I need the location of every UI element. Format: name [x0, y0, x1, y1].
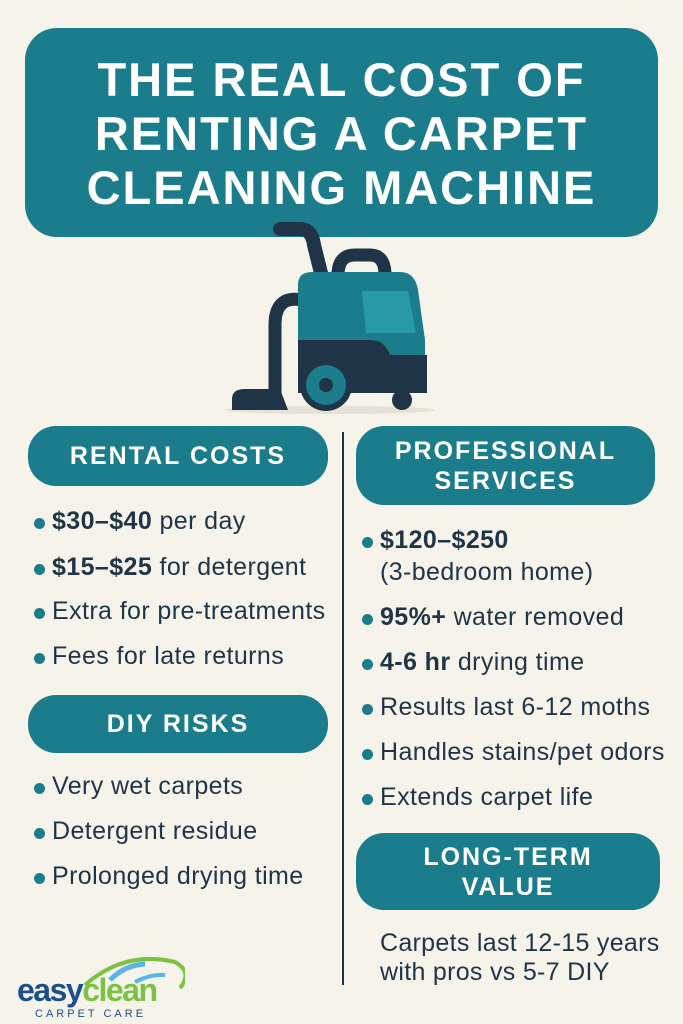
icon: carpet cleaning machine	[225, 222, 435, 414]
list: DIY risks: Very wet carpets	[52, 772, 243, 800]
list: professional services: Extends carpet life	[380, 783, 593, 811]
divider	[342, 432, 344, 985]
list: rental costs	[34, 507, 326, 670]
heading: long-term value: LONG-TERM	[423, 842, 593, 870]
heading: long-term value	[356, 833, 660, 910]
list: professional services: Results last 6-12 moths	[380, 693, 650, 721]
heading: professional services: SERVICES	[434, 466, 576, 494]
panel: professional services	[356, 426, 665, 811]
list: rental costs: $15–$25 for detergent	[52, 553, 306, 581]
list: rental costs: Fees for late returns	[52, 642, 284, 670]
heading: DIY risks	[28, 695, 328, 753]
list: professional services: (3-bedroom home)	[380, 558, 593, 586]
logo: easyclean carpet care: CARPET CARE	[35, 1008, 146, 1020]
text: long-term value	[380, 929, 660, 986]
heading: long-term value: VALUE	[462, 872, 554, 900]
title: RENTING A CARPET	[95, 107, 588, 160]
list: professional services: 4-6 hr drying time	[380, 648, 584, 676]
heading: professional services	[356, 426, 655, 505]
logo: easyclean carpet care	[17, 956, 185, 1020]
list: professional services: $120–$250	[380, 526, 509, 554]
title: THE REAL COST OF	[97, 53, 586, 106]
list: DIY risks: Detergent residue	[52, 817, 258, 845]
list: professional services: 95%+ water removed	[380, 603, 624, 631]
list: DIY risks	[34, 772, 304, 890]
list: professional services: Handles stains/pet odors	[380, 738, 665, 766]
title	[25, 28, 658, 237]
list: rental costs: Extra for pre-treatments	[52, 597, 326, 625]
heading: professional services: PROFESSIONAL	[395, 436, 616, 464]
list: professional services	[362, 526, 665, 811]
list: DIY risks: Prolonged drying time	[52, 862, 304, 890]
panel: long-term value	[356, 833, 660, 986]
logo: easyclean carpet care: easyclean	[17, 972, 157, 1008]
panel: rental costs	[28, 426, 328, 670]
list: rental costs: $30–$40 per day	[52, 507, 246, 535]
title: CLEANING MACHINE	[87, 161, 596, 214]
heading: DIY risks: DIY RISKS	[107, 710, 249, 738]
panel: DIY risks	[28, 695, 328, 890]
text: long-term value: with pros vs 5-7 DIY	[380, 958, 610, 986]
text: long-term value: Carpets last 12-15 years	[380, 929, 660, 957]
heading: rental costs: RENTAL COSTS	[70, 442, 286, 470]
heading: rental costs	[28, 426, 328, 486]
